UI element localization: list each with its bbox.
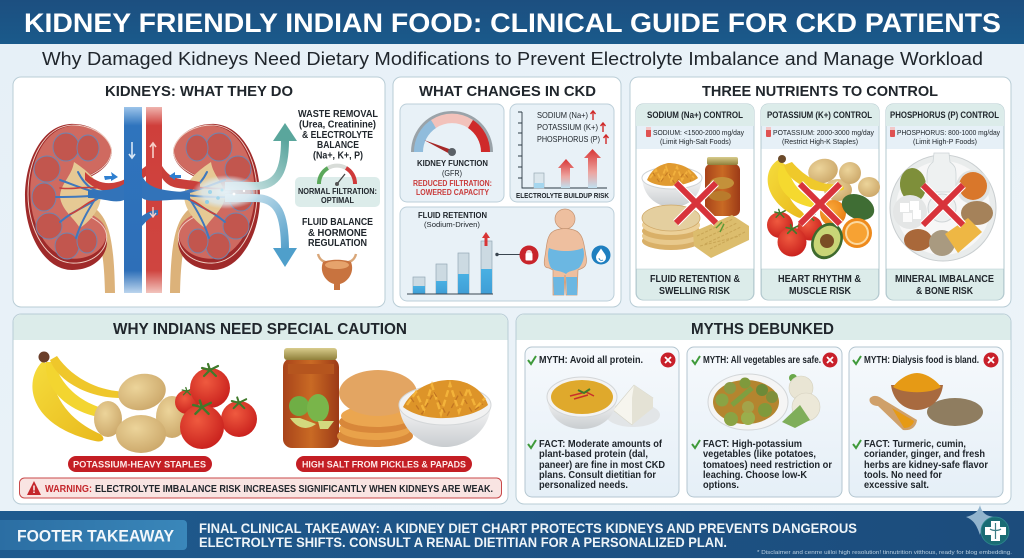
- normal filtration callout: [295, 166, 380, 207]
- title banner: KIDNEY FRIENDLY INDIAN FOOD: CLINICAL GUIDE FOR CKD PATIENTS: [24, 8, 1001, 38]
- fact text: protein: plans. Consult dietitian for: [539, 470, 656, 481]
- card: potassium control: MUSCLE RISK: [789, 286, 852, 297]
- fact text: vegetables: options.: [703, 480, 739, 491]
- fact text: spices: herbs are kidney-safe flavor: [864, 460, 988, 471]
- green lentils: [898, 167, 928, 203]
- heading: special caution: WHY INDIANS NEED SPECIAL CAUTION: [113, 321, 407, 338]
- text: waste removal: [298, 109, 378, 162]
- card: electrolyte buildup chart: SODIUM (Na+): [537, 110, 588, 120]
- card: kidney function gauge: KIDNEY FUNCTION: [417, 158, 488, 168]
- food: avocado half: [805, 217, 849, 265]
- sparkle and medical logo: [966, 505, 1009, 545]
- fact text: vegetables: FACT: High-potassium: [703, 439, 802, 450]
- title banner: [0, 0, 1024, 44]
- panel: why Indians need special caution: [13, 314, 508, 504]
- food: whole avocado: [838, 189, 878, 225]
- card: sodium control: FLUID RETENTION &: [650, 274, 740, 285]
- label pill: high salt: HIGH SALT FROM PICKLES & PAPADS: [302, 460, 466, 470]
- icon: test tube: [890, 127, 895, 137]
- connector to salt icon: [495, 253, 521, 256]
- text: waste removal: (Urea, Creatinine): [299, 120, 376, 130]
- food: potatoes: [805, 156, 880, 201]
- final clinical takeaway text: ELECTROLYTE SHIFTS. CONSULT A RENAL DIETITIAN FOR A PERSONALIZED PLAN.: [199, 534, 727, 550]
- text: waste removal: BALANCE: [317, 140, 359, 151]
- orange lentil bowl: [956, 170, 990, 204]
- card: electrolyte buildup chart: POTASSIUM (K+): [537, 122, 598, 132]
- card: myth dialysis food: [849, 347, 1003, 497]
- paneer bowl: [893, 195, 927, 229]
- food: potatoes large: [94, 369, 188, 453]
- card: sodium control: (Limit High-Salt Foods): [660, 137, 731, 146]
- icon: red x: [984, 352, 998, 368]
- card: sodium control: SODIUM (Na+) CONTROL: [647, 110, 744, 120]
- icon: warning triangle: [27, 481, 41, 495]
- card: sodium control: SWELLING RISK: [659, 286, 731, 297]
- fluid retention bars: [407, 232, 493, 294]
- icon: bladder: [318, 254, 356, 290]
- normal filtration callout: NORMAL FILTRATION:: [298, 187, 377, 196]
- card: fluid retention: [400, 207, 614, 301]
- fact text: vegetables: vegetables (like potatoes,: [703, 449, 816, 460]
- mixed nuts: [961, 201, 993, 225]
- arrow: fluid balance down: [225, 198, 297, 267]
- card: potassium control: [761, 104, 880, 300]
- seeds: [929, 230, 955, 256]
- card: kidney function gauge: LOWERED CAPACITY: [416, 187, 489, 197]
- card: electrolyte buildup chart: PHOSPHORUS (P): [537, 134, 600, 144]
- card: myth dialysis food: MYTH: Dialysis food is bland.: [864, 354, 979, 366]
- card: potassium control: HEART RHYTHM &: [778, 274, 861, 285]
- icon: red cross: [676, 183, 716, 223]
- fact text: protein: FACT: Moderate amounts of: [539, 439, 663, 450]
- card: phosphorus control: MINERAL IMBALANCE: [895, 274, 994, 285]
- card: myth avoid protein: MYTH: Avoid all protein.: [539, 354, 643, 366]
- food: bananas: [768, 155, 844, 218]
- food: pickle jar: [705, 157, 740, 216]
- heading: three nutrients: THREE NUTRIENTS TO CONTROL: [702, 83, 938, 100]
- fact text: vegetables: leaching. Choose low-K: [703, 470, 808, 481]
- icon: red x: [660, 352, 676, 368]
- card: myth vegetables: [687, 347, 842, 497]
- card: myth vegetables: MYTH: All vegetables are safe.: [703, 354, 821, 366]
- card: phosphorus control: & BONE RISK: [916, 286, 974, 297]
- card: sodium control: SODIUM: <1500-2000 mg/day: [653, 128, 744, 137]
- card: potassium control: POTASSIUM: 2000-3000 mg/day: [773, 128, 874, 137]
- card: phosphorus control: [886, 104, 1004, 300]
- text: fluid balance: & HORMONE: [308, 228, 367, 239]
- label pill: potassium-heavy staples: POTASSIUM-HEAVY STAPLES: [73, 460, 206, 470]
- card: kidney function gauge: REDUCED FILTRATION:: [413, 178, 492, 188]
- footer takeaway label: [0, 520, 187, 550]
- card: kidney function gauge: (GFR): [442, 168, 462, 178]
- kidney anatomy illustration: [25, 107, 260, 293]
- cheese slices: [945, 218, 982, 253]
- milk bottle: [927, 153, 956, 192]
- food: gourd plate and cauliflower: [708, 374, 820, 430]
- almonds: [904, 229, 932, 251]
- final clinical takeaway text: FINAL CLINICAL TAKEAWAY: A KIDNEY DIET CHART PROTECTS KIDNEYS AND PREVENTS DANGEROUS: [199, 520, 857, 536]
- food: tomatoes: [767, 209, 822, 256]
- food: orange half: [842, 218, 872, 248]
- final clinical takeaway text: [199, 520, 857, 550]
- fact text: spices: FACT: Turmeric, cumin,: [864, 439, 966, 450]
- heading: what changes: WHAT CHANGES IN CKD: [419, 83, 596, 100]
- text: fluid balance: FLUID BALANCE: [302, 217, 373, 228]
- food: phosphorus plate: [890, 153, 996, 261]
- label pill: high salt: [296, 456, 472, 472]
- icon: red cross: [923, 185, 963, 225]
- food: orange: [820, 200, 846, 226]
- panel: three nutrients to control: [630, 77, 1011, 307]
- fact text: protein: [528, 439, 665, 491]
- fact text: spices: excessive salt.: [864, 480, 929, 491]
- footer band: [0, 505, 1024, 558]
- footer takeaway label: FOOTER TAKEAWAY: [17, 528, 174, 546]
- food: bananas large: [32, 352, 122, 441]
- card: phosphorus control: (Limit High-P Foods): [913, 137, 977, 146]
- card: potassium control: (Restrict High-K Staples): [782, 137, 858, 146]
- subtitle: Why Damaged Kidneys Need Dietary Modifications to Prevent Electrolyte Imbalance and Manage Workload: [42, 48, 983, 69]
- heading: myths debunked: MYTHS DEBUNKED: [691, 321, 834, 338]
- card: fluid retention: (Sodium-Driven): [424, 220, 480, 229]
- food: namkeen bowl large: [399, 380, 491, 447]
- icon: water drop: [592, 246, 610, 264]
- fact text: spices: tools. No need for: [864, 470, 942, 481]
- fact text: vegetables: tomatoes) need restriction or: [703, 460, 832, 471]
- food: papad stack: [642, 205, 700, 250]
- disclaimer: * Disclaimer and cenrre uiiloi high resolution! tinnutrition vitthous, ready for blog embedding.: [757, 550, 1012, 556]
- fact text: vegetables: [692, 439, 832, 491]
- food: papad large: [337, 370, 417, 447]
- food: noodle block: [693, 215, 749, 258]
- card: sodium control: [636, 104, 754, 300]
- center bowl: [928, 194, 956, 222]
- panel: myths debunked: [516, 314, 1011, 504]
- text: fluid balance: [302, 217, 373, 249]
- card: electrolyte buildup chart: [510, 104, 614, 202]
- warning strip: WARNING:: [45, 484, 92, 495]
- card: phosphorus control: PHOSPHORUS (P) CONTROL: [890, 110, 1000, 120]
- figure: swollen body: [544, 209, 587, 295]
- card: kidney function gauge: [400, 104, 504, 202]
- fact text: protein: paneer) are fine in most CKD: [539, 460, 665, 471]
- card: fluid retention: FLUID RETENTION: [418, 210, 487, 220]
- card: potassium control: POTASSIUM (K+) CONTROL: [767, 110, 873, 120]
- card: electrolyte buildup chart: ELECTROLYTE BUILDUP RISK: [516, 191, 609, 200]
- fact text: spices: coriander, ginger, and fresh: [864, 449, 985, 460]
- food: pickle jar large: [283, 348, 339, 448]
- text: fluid balance: REGULATION: [308, 238, 367, 249]
- card: phosphorus control: PHOSPHORUS: 800-1000 mg/day: [897, 128, 1000, 137]
- warning strip: ELECTROLYTE IMBALANCE RISK INCREASES SIGNIFICANTLY WHEN KIDNEYS ARE WEAK.: [95, 484, 493, 495]
- text: waste removal: WASTE REMOVAL: [298, 109, 378, 120]
- warning strip: [20, 478, 502, 498]
- icon: test tube: [646, 127, 651, 137]
- fact text: spices: [853, 439, 988, 491]
- label pill: potassium-heavy staples: [68, 456, 212, 472]
- text: waste removal: (Na+, K+, P): [313, 150, 363, 162]
- icon: salt shaker: [520, 246, 538, 264]
- text: waste removal: & ELECTROLYTE: [302, 130, 373, 141]
- food: dal and paneer: [547, 377, 660, 429]
- icon: test tube: [766, 127, 771, 137]
- arrow: waste removal up: [225, 123, 297, 186]
- heading: kidneys: KIDNEYS: WHAT THEY DO: [105, 83, 293, 100]
- fact text: protein: plant-based protein (dal,: [539, 449, 648, 460]
- normal filtration callout: OPTIMAL: [321, 196, 354, 205]
- food: spices: [869, 373, 983, 430]
- food: namkeen bowl: [642, 163, 702, 207]
- fact text: protein: personalized needs.: [539, 480, 628, 491]
- filtration glow: [192, 175, 260, 209]
- food: tomatoes large: [175, 364, 257, 449]
- panel: what changes in CKD: [393, 77, 621, 307]
- panel: kidneys what they do: [13, 77, 385, 307]
- icon: red x: [822, 352, 838, 368]
- card: myth avoid protein: [525, 347, 679, 497]
- icon: red cross: [800, 184, 840, 224]
